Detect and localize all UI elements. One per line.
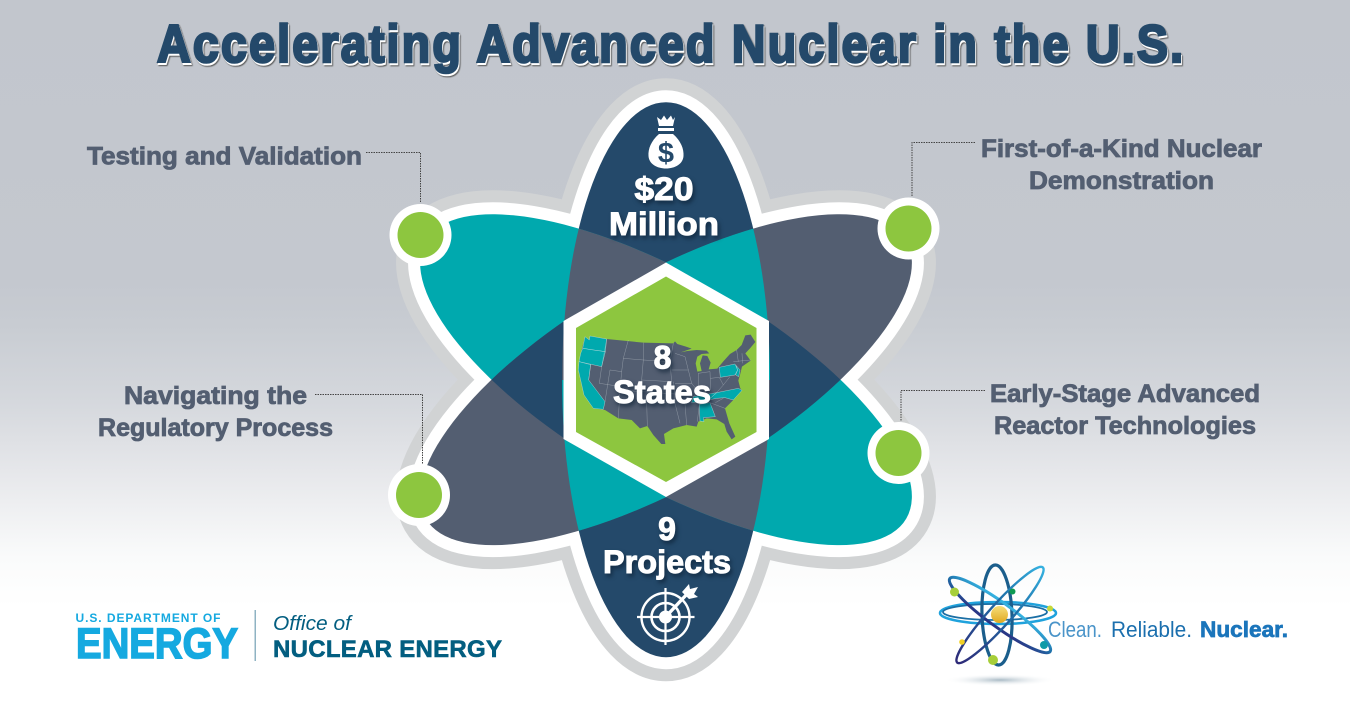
logo: atom [940, 560, 1057, 686]
navy overlap of diagonal orbits [492, 322, 840, 438]
logo tagline: Reliable. [1111, 617, 1192, 642]
text: $20 Million: Million [609, 206, 719, 242]
text: 9 Projects: 9 [658, 511, 676, 547]
atom white outline [374, 102, 958, 657]
leader line: early stage [901, 390, 985, 421]
label: testing and validation: Testing and Validation [87, 142, 362, 170]
icon: target with arrow [637, 584, 698, 645]
logo: US Department of Energy [76, 610, 502, 668]
vertical orbit navy [562, 102, 770, 657]
orbit dot: top right [878, 198, 940, 260]
label: first-of-a-kind: First-of-a-Kind Nuclear [981, 135, 1262, 163]
label: first-of-a-kind [981, 135, 1262, 195]
icon: money bag [648, 116, 684, 170]
label: early-stage: Early-Stage Advanced [990, 380, 1260, 408]
leader line: first of a kind [912, 142, 975, 197]
orbit dot: top left [390, 204, 452, 266]
label: regulatory process [98, 382, 333, 442]
logo: US Department of Energy: U.S. DEPARTMENT OF [76, 611, 220, 625]
slate orbit top-right to bottom-left [374, 151, 958, 609]
white hexagon [564, 262, 769, 497]
logo tagline: Nuclear. [1200, 617, 1288, 642]
label: first-of-a-kind: Demonstration [1029, 167, 1214, 195]
atom diagram [374, 102, 958, 657]
green hexagon [576, 276, 756, 482]
text: 8 States: 8 [654, 340, 671, 376]
logo tagline: Clean. [1048, 617, 1102, 642]
title: Accelerating Advanced Nuclear in the U.S. [157, 14, 1183, 74]
logo: US Department of Energy: NUCLEAR ENERGY [273, 636, 502, 663]
atom outer grey outline [374, 102, 958, 657]
logo: US Department of Energy: ENERGY [76, 620, 238, 668]
orbit dot: bottom left [388, 464, 450, 526]
orbit dot: bottom right [868, 422, 930, 484]
text: $20 Million [609, 171, 719, 242]
label: regulatory process: Navigating the [124, 382, 307, 410]
text: 8 States: States [613, 374, 711, 410]
text: 8 States [613, 340, 711, 410]
state borders [589, 339, 751, 426]
text: $20 Million: $20 [634, 171, 694, 207]
highlighted states [578, 336, 742, 422]
icon: money bag: $ [658, 138, 674, 170]
vertical overlap segments [562, 228, 770, 531]
teal orbit top-left to bottom-right [374, 151, 958, 609]
text: 9 Projects [603, 511, 731, 580]
label: early-stage [990, 380, 1260, 440]
label: regulatory process: Regulatory Process [98, 414, 333, 442]
US map [578, 335, 755, 444]
logo tagline [1048, 617, 1288, 642]
label: early-stage: Reactor Technologies [994, 412, 1256, 440]
logo: US Department of Energy: Office of [273, 613, 354, 635]
leader line: testing [366, 152, 420, 203]
leader line: regulatory [315, 394, 422, 464]
map outline [578, 335, 755, 444]
text: 9 Projects: Projects [603, 544, 731, 580]
